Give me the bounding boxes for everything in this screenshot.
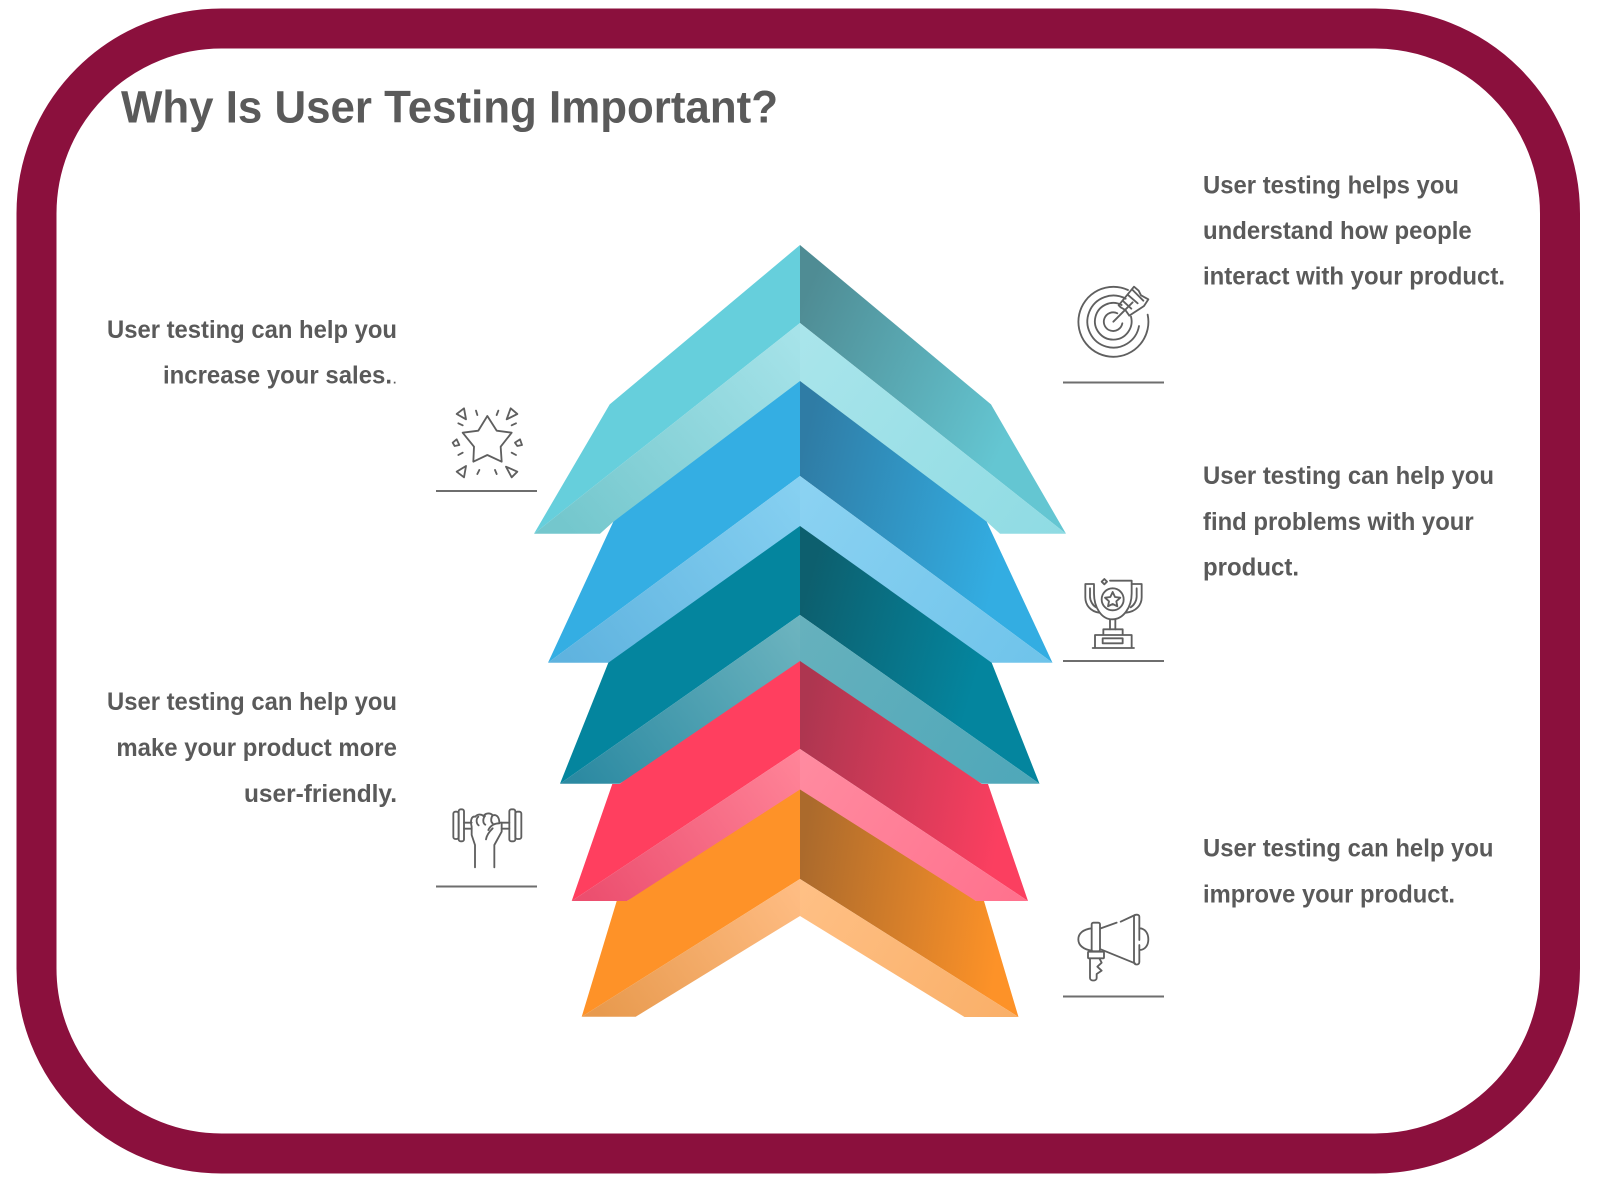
text block: more user-friendly: make your product more <box>116 734 397 762</box>
layer: dark teal chevron <box>560 526 1040 784</box>
text block: find problems <box>1203 462 1494 582</box>
text block: more user-friendly: user-friendly. <box>244 780 397 808</box>
icon: star with sparks <box>453 408 522 477</box>
divider: megaphone <box>1063 996 1164 998</box>
text block: increase your sales: increase your sales. <box>163 362 392 390</box>
text block: more user-friendly <box>107 688 397 808</box>
text block: improve your product: improve your product. <box>1203 880 1455 908</box>
layer: blue chevron <box>548 381 1052 663</box>
layer: red chevron <box>572 661 1028 901</box>
divider: trophy <box>1063 660 1164 662</box>
text block: understand how people interact <box>1203 172 1505 291</box>
text block: find problems: User testing can help you <box>1203 462 1494 490</box>
icon: megaphone <box>1078 915 1148 980</box>
divider: dumbbell <box>436 886 537 888</box>
icon: trophy <box>1085 579 1142 648</box>
text block: improve your product: User testing can help you <box>1203 834 1494 862</box>
icon: fist with dumbbell <box>453 809 521 867</box>
layer: orange chevron <box>582 790 1018 1017</box>
divider: target <box>1063 382 1164 384</box>
text block: improve your product <box>1203 834 1494 908</box>
icon: target with arrow <box>1078 287 1148 357</box>
text block: find problems: product. <box>1203 554 1299 582</box>
text block: more user-friendly: User testing can help you <box>107 688 397 716</box>
layer: teal chevron <box>534 245 1066 534</box>
text block: find problems: find problems with your <box>1203 508 1474 536</box>
title: Why Is User Testing Important? <box>121 82 778 132</box>
divider: star <box>436 490 537 492</box>
text block: increase your sales: . <box>393 373 396 387</box>
text block: understand how people interact: User testing helps you <box>1203 172 1459 200</box>
chart: stacked chevron arrow <box>534 245 1066 1017</box>
text block: understand how people interact: interact with your product. <box>1203 263 1505 291</box>
text block: increase your sales: User testing can help you <box>107 316 397 344</box>
text block: increase your sales <box>107 316 397 390</box>
text block: understand how people interact: understand how people <box>1203 217 1472 245</box>
